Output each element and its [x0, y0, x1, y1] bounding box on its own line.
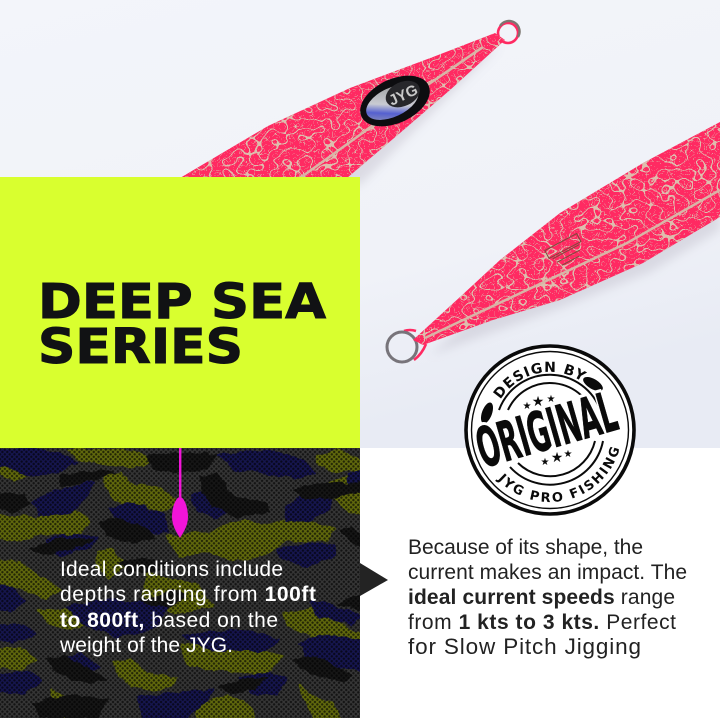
stamp stars: ★	[532, 394, 544, 410]
depth text: weight of the JYG.	[59, 634, 233, 657]
stamp arc text	[493, 362, 619, 502]
stamp arc text: JYG PRO FISHING	[495, 446, 619, 502]
navy blobs	[0, 449, 362, 718]
lure: lower jig with ring	[387, 115, 720, 362]
olive blobs	[0, 449, 362, 720]
stamp stars: ★	[547, 394, 556, 405]
lure: upper jig with JYG badge	[170, 21, 520, 185]
stamp: original design	[464, 344, 636, 516]
photo background	[0, 0, 720, 448]
current speed text: current makes an impact. The	[408, 561, 687, 584]
stamp stars	[523, 394, 573, 468]
callout arrow	[360, 563, 388, 596]
stamp stars: ★	[564, 449, 573, 460]
stamp ovals	[581, 374, 605, 394]
panel: lime title	[0, 177, 360, 448]
stamp stars: ★	[541, 457, 550, 468]
depth text	[59, 558, 316, 657]
icon: sinker on line	[172, 448, 188, 538]
heading: SERIES	[38, 319, 243, 375]
heading	[38, 274, 326, 375]
lure ring	[387, 330, 426, 362]
stamp arc text: DESIGN BY	[493, 362, 587, 398]
stamp word	[469, 380, 624, 480]
current speed text	[408, 536, 687, 659]
stamp stars: ★	[523, 401, 532, 412]
lure ring	[498, 21, 520, 43]
engraved mark	[545, 234, 587, 269]
black blobs	[0, 453, 362, 718]
current speed text: from 1 kts to 3 kts. Perfect	[408, 611, 676, 634]
stamp stars: ★	[551, 450, 563, 466]
depth text: Ideal conditions include	[60, 558, 283, 581]
current speed text: ideal current speeds range	[408, 586, 675, 609]
JYG badge: JYG	[386, 81, 421, 109]
panel: white lower right	[360, 448, 720, 720]
current speed text: Because of its shape, the	[408, 536, 643, 559]
current speed text: for Slow Pitch Jigging	[408, 634, 641, 659]
depth text: depths ranging from 100ft	[60, 583, 316, 606]
heading: DEEP SEA	[38, 274, 326, 330]
depth text: to 800ft, based on the	[60, 609, 278, 632]
panel: camouflage depth	[0, 448, 388, 720]
JYG badge	[352, 65, 438, 137]
inner ring arcs	[499, 375, 601, 412]
